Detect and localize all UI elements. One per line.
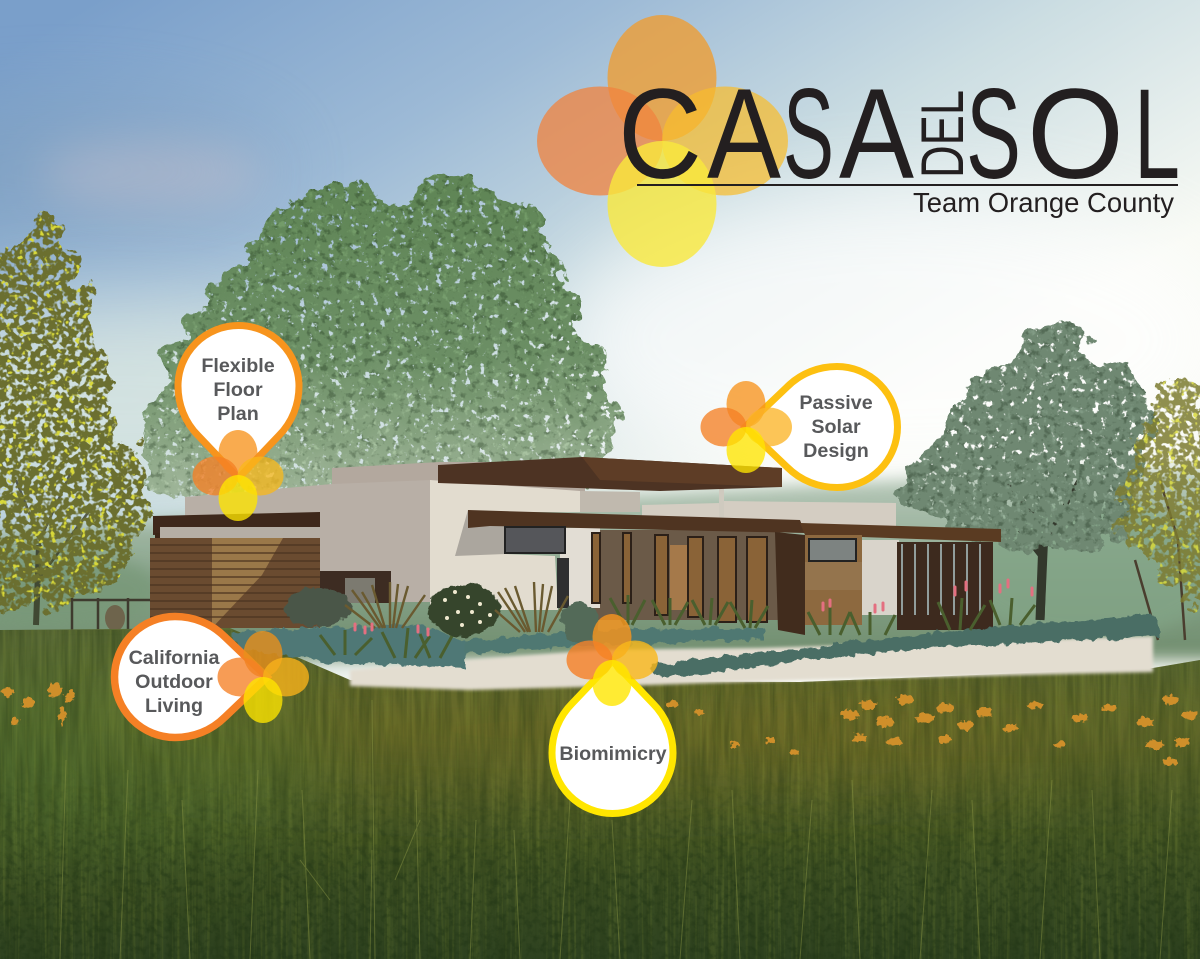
planter wall [350, 636, 1153, 690]
logo: Casa del Sol [537, 15, 1180, 267]
left yellow tree [0, 212, 145, 625]
left main wall [185, 480, 432, 602]
meadow ground [0, 628, 1200, 959]
tall grass blades [60, 700, 1172, 959]
sky background [0, 0, 1200, 700]
label: Plan [217, 403, 259, 425]
back right blocks [642, 487, 896, 527]
teal groundcover [230, 615, 1158, 678]
flower marker [218, 631, 309, 723]
callout: California Outdoor Living [115, 616, 309, 738]
shrubs [285, 584, 598, 642]
label: Passive [799, 392, 873, 414]
wordmark CASA: C [618, 63, 702, 206]
wordmark CASA: A [707, 63, 782, 206]
label: Solar [811, 416, 861, 438]
callout: Flexible Floor Plan [178, 326, 299, 521]
logo flower [537, 15, 788, 267]
porch wood panel [670, 545, 687, 610]
wordmark SOL: O [1027, 63, 1124, 206]
label: Living [145, 695, 203, 717]
logo rule [637, 184, 1178, 186]
flower marker [192, 430, 284, 521]
louvers [592, 533, 767, 622]
label: California [129, 647, 220, 669]
fence [72, 598, 150, 630]
wordmark DEL: DEL [909, 90, 976, 178]
spiky plants [320, 595, 1035, 658]
right grey-green tree [905, 330, 1150, 620]
label: Floor [213, 379, 263, 401]
wordmark SOL: S [966, 63, 1021, 206]
distant tree line [0, 470, 1200, 660]
pergola [153, 512, 320, 535]
orange wildflowers [2, 683, 1198, 766]
white blossoms on shrub [443, 590, 492, 627]
tagline: Team Orange County [913, 187, 1174, 218]
pink flower spikes [355, 580, 1032, 635]
landscaping plants [230, 580, 1158, 678]
pampas grasses [345, 582, 568, 632]
label: Biomimicry [559, 743, 667, 765]
callout: Passive Solar Design [700, 366, 897, 488]
large central tree [140, 181, 610, 500]
upper roof [438, 457, 782, 491]
flower marker [700, 381, 792, 473]
dark slats [897, 542, 993, 630]
bright main wall [430, 480, 580, 610]
back upper block [332, 462, 585, 495]
wordmark CASA: A [839, 63, 915, 206]
callout: Biomimicry [552, 614, 673, 813]
dark column [775, 532, 805, 635]
lower roof left section [468, 510, 805, 533]
wordmark CASA: S [783, 63, 834, 206]
label: Outdoor [135, 671, 213, 693]
side dark doorway [320, 571, 391, 603]
label: Flexible [201, 355, 275, 377]
white right wall [862, 540, 899, 615]
flower marker [566, 614, 658, 706]
lower roof right section [800, 523, 1001, 542]
house [72, 457, 1001, 635]
wood panel and upper window [805, 535, 862, 625]
window main [505, 527, 565, 553]
porch interior [590, 530, 780, 620]
wall shadow [455, 510, 505, 556]
horizontal wood screen [150, 538, 320, 628]
right edge yellow tree [1120, 378, 1200, 640]
label: Design [803, 440, 869, 462]
